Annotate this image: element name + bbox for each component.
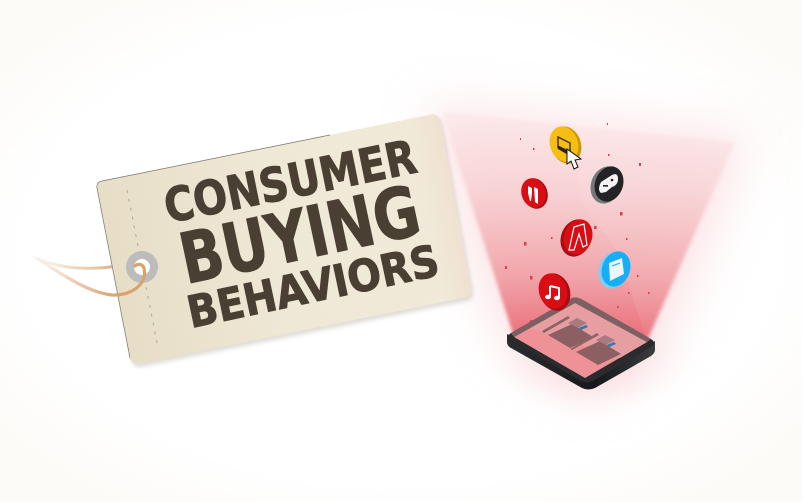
icon: black game controller disc xyxy=(585,162,628,208)
icon: red music disc xyxy=(534,269,575,315)
light beam from tablet xyxy=(442,112,735,378)
tag title: CONSUMER xyxy=(159,130,421,235)
icon: red restaurant disc xyxy=(517,175,552,212)
string through eyelet xyxy=(32,256,145,295)
tag shadow xyxy=(100,118,473,367)
eyelet xyxy=(126,251,158,283)
background tint xyxy=(425,105,750,420)
tag title xyxy=(159,130,444,339)
top bezel translucent xyxy=(511,298,651,342)
tablet screen xyxy=(514,303,647,378)
tag title: BEHAVIORS xyxy=(183,236,444,339)
icon: red trousers disc xyxy=(555,215,597,261)
tag dark edge xyxy=(97,135,330,358)
tablet device xyxy=(507,298,655,390)
perforation line xyxy=(127,190,158,348)
tablet body side xyxy=(507,334,655,390)
price tag xyxy=(97,114,473,367)
string behind tag xyxy=(32,256,118,268)
tag paper xyxy=(97,114,471,364)
tablet bezel xyxy=(508,298,654,382)
icon: yellow cursor disc xyxy=(545,122,586,169)
confetti particles xyxy=(505,123,650,322)
screen content row 1 xyxy=(542,316,593,348)
tag title: BUYING xyxy=(172,170,427,301)
icon: blue book disc xyxy=(593,247,635,293)
screen content row 2 xyxy=(570,333,621,365)
